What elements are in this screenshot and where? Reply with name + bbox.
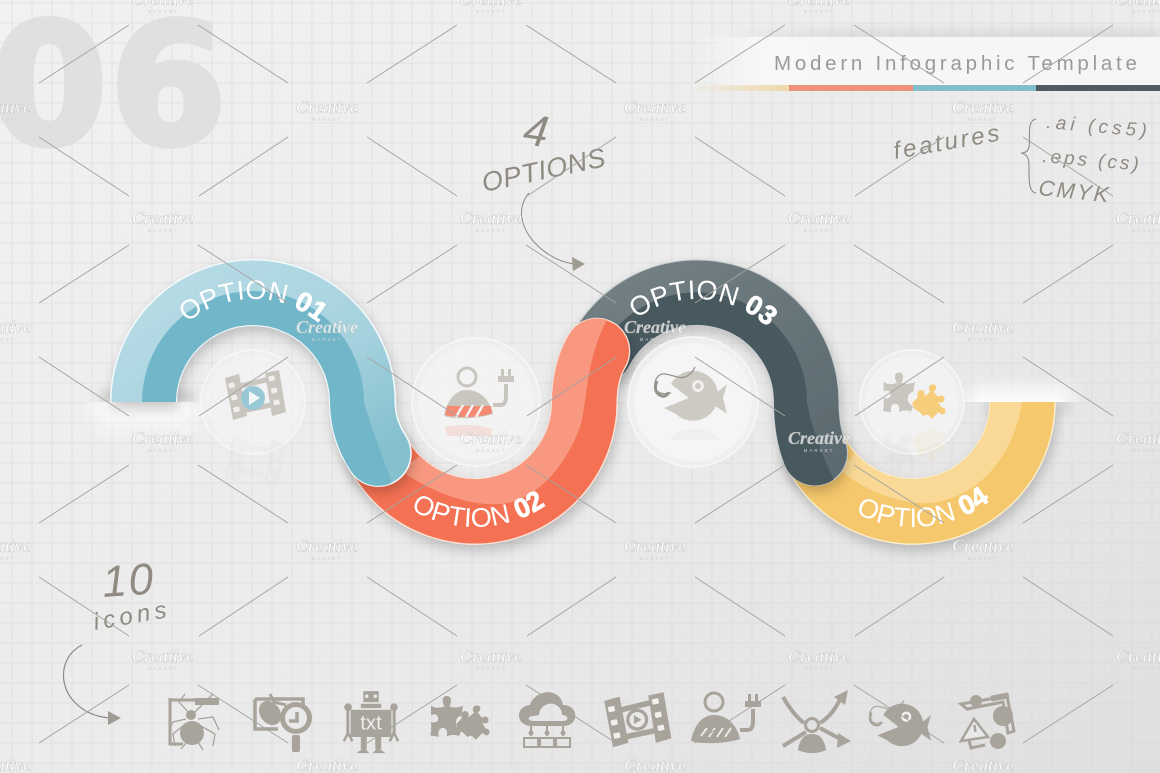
handwritten note: 4 options <box>479 105 610 198</box>
ribbon: option 02: OPTION 02 <box>414 491 546 528</box>
right flap shadow <box>985 402 1070 412</box>
handwritten note: features: .ai (cs5) <box>1046 112 1151 142</box>
watermarks: Creative <box>952 97 1014 117</box>
ribbon: option 01 <box>108 259 419 498</box>
circle icon: fish on hook <box>628 337 758 467</box>
watermarks: MARKET <box>148 228 178 233</box>
watermarks: MARKET <box>312 556 342 561</box>
ribbon: option 02 <box>342 318 636 556</box>
watermarks: MARKET <box>968 117 998 122</box>
watermarks: Creative <box>296 536 358 556</box>
watermarks: MARKET <box>312 337 342 342</box>
header banner <box>690 30 1160 86</box>
icon row <box>169 690 1014 753</box>
watermarks: MARKET <box>148 9 178 14</box>
icon: split arrows <box>783 690 851 753</box>
header title: Modern Infographic Template <box>774 52 1140 75</box>
handwritten note: features <box>891 112 1151 207</box>
watermarks: Creative <box>132 646 194 666</box>
icon: person with plug <box>691 693 761 743</box>
watermarks: Creative <box>788 646 850 666</box>
watermarks: MARKET <box>640 117 670 122</box>
ribbon: option 01: OPTION 01 <box>180 280 326 323</box>
colour stripe <box>690 85 1160 91</box>
watermarks: MARKET <box>476 448 506 453</box>
watermarks: Creative <box>788 208 850 228</box>
handwritten note: 10 icons <box>91 554 173 636</box>
watermarks: MARKET <box>312 117 342 122</box>
watermarks: Creative <box>296 317 358 337</box>
ribbon: option 04: OPTION 04 <box>859 486 989 527</box>
brace <box>1021 119 1036 193</box>
icon: puzzle pieces <box>430 696 490 740</box>
watermarks: MARKET <box>640 337 670 342</box>
ribbon: option 04 <box>780 402 1062 556</box>
handwritten note: 4 options: 4 <box>521 105 552 157</box>
watermarks: Creative <box>132 208 194 228</box>
ribbon: option 03 <box>578 260 855 497</box>
icon: spider <box>169 694 219 750</box>
ribbon: option 03: OPTION 03 <box>630 280 777 325</box>
handwritten note: 10 icons: 10 <box>100 554 157 607</box>
icon: film strip <box>604 692 671 747</box>
watermarks: Creative <box>460 208 522 228</box>
watermarks: Creative <box>952 536 1014 556</box>
watermarks: MARKET <box>804 666 834 671</box>
watermarks: Creative <box>460 428 522 448</box>
watermarks: MARKET <box>804 228 834 233</box>
watermarks: Creative <box>624 97 686 117</box>
watermarks: MARKET <box>476 228 506 233</box>
watermarks: MARKET <box>148 448 178 453</box>
arrow: options to ribbon <box>522 193 585 271</box>
icon: robot <box>344 691 398 753</box>
icon: warning collage <box>961 692 1014 749</box>
icon: cloud network <box>519 692 575 747</box>
handwritten note: features: features <box>891 119 1004 165</box>
watermarks: Creative <box>788 428 850 448</box>
arrow: icons <box>63 645 121 725</box>
circle icon: person with plug <box>412 338 540 466</box>
watermarks: Creative <box>624 317 686 337</box>
handwritten note: features: .eps (cs) <box>1042 146 1143 176</box>
handwritten note: 4 options: OPTIONS <box>479 142 610 198</box>
watermarks: MARKET <box>804 448 834 453</box>
watermarks: Creative <box>952 317 1014 337</box>
watermarks: MARKET <box>148 666 178 671</box>
circle icon: puzzle <box>860 350 964 473</box>
icon: fish on hook <box>870 700 931 746</box>
watermarks: MARKET <box>968 337 998 342</box>
watermarks: Creative <box>624 536 686 556</box>
handwritten note: features: CMYK <box>1037 175 1112 207</box>
watermarks: MARKET <box>476 9 506 14</box>
watermarks: Creative <box>296 97 358 117</box>
icon: bug search <box>254 694 312 752</box>
icon: robot: txt <box>360 712 382 734</box>
handwritten note: 10 icons: icons <box>91 596 173 636</box>
watermarks: MARKET <box>804 9 834 14</box>
watermarks: MARKET <box>640 556 670 561</box>
right flap <box>966 382 1076 402</box>
flap shadow and left flap <box>89 388 200 430</box>
circle icon: film <box>201 350 305 486</box>
watermarks: Creative <box>132 428 194 448</box>
watermarks: MARKET <box>968 556 998 561</box>
watermarks: MARKET <box>476 666 506 671</box>
watermarks: Creative <box>460 646 522 666</box>
